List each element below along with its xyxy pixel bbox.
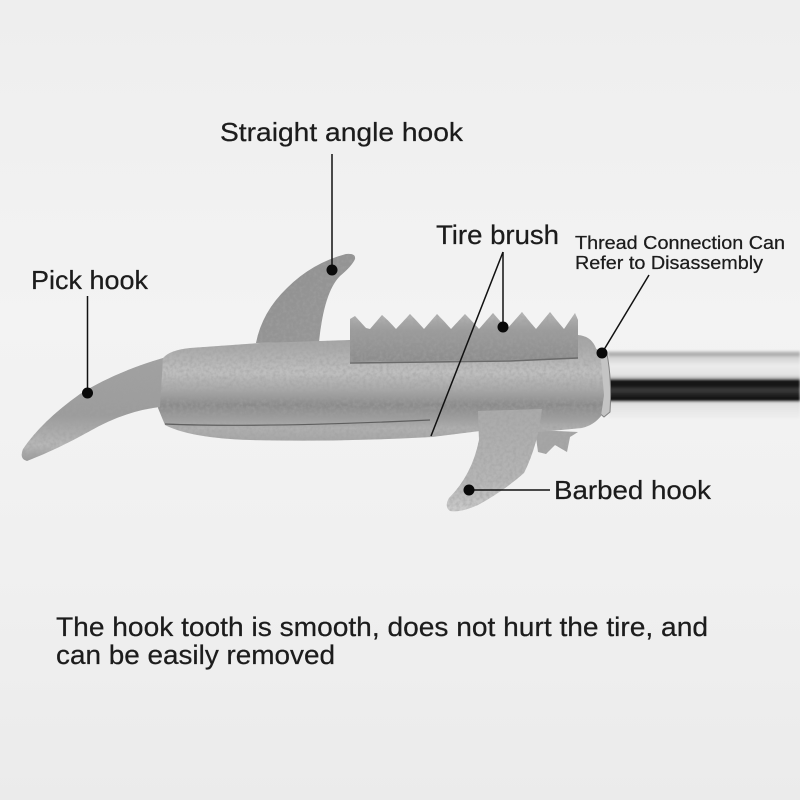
brush shadow line (350, 358, 578, 363)
callout: straight angle hook: Straight angle hook (220, 117, 464, 147)
tire brush (350, 312, 578, 362)
callout: pick hook (31, 265, 149, 398)
callout: tire brush: Tire brush (436, 220, 559, 250)
body seam (165, 420, 430, 425)
threaded collar (597, 350, 611, 417)
main body (158, 335, 604, 441)
pick hook (22, 358, 163, 461)
description text: The hook tooth is smooth, does not hurt the tire, and (56, 612, 708, 642)
callout: straight angle hook (220, 117, 464, 276)
barbed hook (447, 409, 542, 511)
callout: barbed hook: Barbed hook (554, 475, 712, 505)
callout: barbed hook (464, 475, 712, 505)
steel rod (608, 351, 800, 418)
callout: tire brush (431, 220, 559, 436)
rear teeth (535, 430, 578, 454)
callout: thread connection: Refer to Disassembly (575, 252, 764, 273)
tool illustration (22, 254, 800, 511)
callout: pick hook: Pick hook (31, 265, 149, 295)
callout: thread connection (575, 232, 785, 358)
description text (56, 612, 708, 670)
description text: can be easily removed (56, 640, 335, 670)
straight angle hook (256, 254, 355, 343)
callout: thread connection: Thread Connection Can (575, 232, 785, 253)
